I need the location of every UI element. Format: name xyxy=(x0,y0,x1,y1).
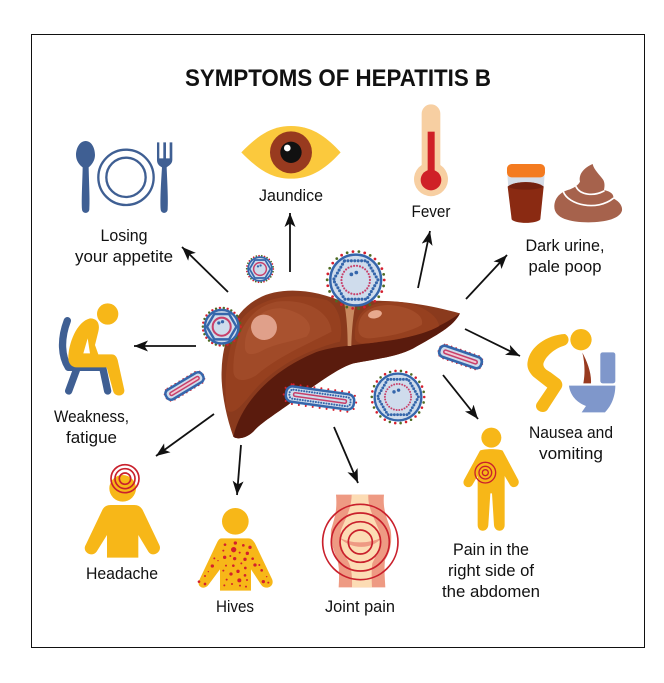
label: nausea and vomiting: vomiting xyxy=(539,445,603,463)
icon: headache figure xyxy=(85,465,160,558)
label: fever: Fever xyxy=(412,203,451,221)
label: jaundice: Jaundice xyxy=(259,187,323,205)
arrow: to abdomen xyxy=(443,375,478,419)
arrow: to fever xyxy=(418,231,430,288)
virus: top large xyxy=(327,251,384,309)
label: pain in the right side of the abdomen: Pain in the xyxy=(453,541,529,559)
label: weakness, fatigue: fatigue xyxy=(66,429,117,447)
icon: abdomen pain figure xyxy=(463,428,519,531)
virus rod: right xyxy=(437,343,484,371)
arrow: to dark urine xyxy=(466,255,507,299)
virus: small top xyxy=(247,256,273,282)
label: pain in the right side of the abdomen: right side of xyxy=(448,562,534,580)
icon: urine cup xyxy=(507,164,545,223)
title: SYMPTOMS OF HEPATITIS B xyxy=(185,65,491,92)
label: dark urine, pale poop xyxy=(526,237,604,276)
arrow: to joint pain xyxy=(334,427,358,483)
label: dark urine, pale poop: pale poop xyxy=(528,258,602,276)
label: losing your appetite: Losing xyxy=(100,227,148,245)
label: pain in the right side of the abdomen xyxy=(442,541,540,601)
label: dark urine, pale poop: Dark urine, xyxy=(526,237,604,255)
label: losing your appetite xyxy=(75,227,173,266)
virus rod: centre xyxy=(283,383,357,413)
arrow: to nausea xyxy=(465,329,520,356)
ligament xyxy=(344,303,355,346)
arrow: to hives xyxy=(237,445,241,495)
icon: joint xyxy=(323,495,398,587)
icon: tired sitting figure xyxy=(63,303,124,395)
liver highlights xyxy=(247,311,281,344)
arrow: to appetite xyxy=(182,247,228,292)
label: pain in the right side of the abdomen: the abdomen xyxy=(442,583,540,601)
label: joint pain: Joint pain xyxy=(325,598,395,616)
arrow: to weakness xyxy=(134,345,196,347)
icon: cutlery and plate xyxy=(76,141,172,213)
icon: thermometer xyxy=(414,104,448,196)
icon: hives figure xyxy=(198,508,273,591)
icon: eye xyxy=(241,126,341,179)
liver xyxy=(222,291,460,438)
virus: left xyxy=(203,308,241,346)
virus rod: left xyxy=(162,369,207,403)
icon: vomiting figure xyxy=(527,329,615,412)
arrow: to headache xyxy=(156,414,214,456)
label: nausea and vomiting xyxy=(529,424,613,463)
icon: poop xyxy=(554,164,622,222)
label: weakness, fatigue: Weakness, xyxy=(54,408,129,426)
virus: lower right xyxy=(372,371,424,423)
label: weakness, fatigue xyxy=(54,408,129,447)
label: hives: Hives xyxy=(216,598,254,616)
arrow: to jaundice xyxy=(289,213,291,272)
label: losing your appetite: your appetite xyxy=(75,248,173,266)
label: nausea and vomiting: Nausea and xyxy=(529,424,613,442)
label: headache: Headache xyxy=(86,565,158,583)
